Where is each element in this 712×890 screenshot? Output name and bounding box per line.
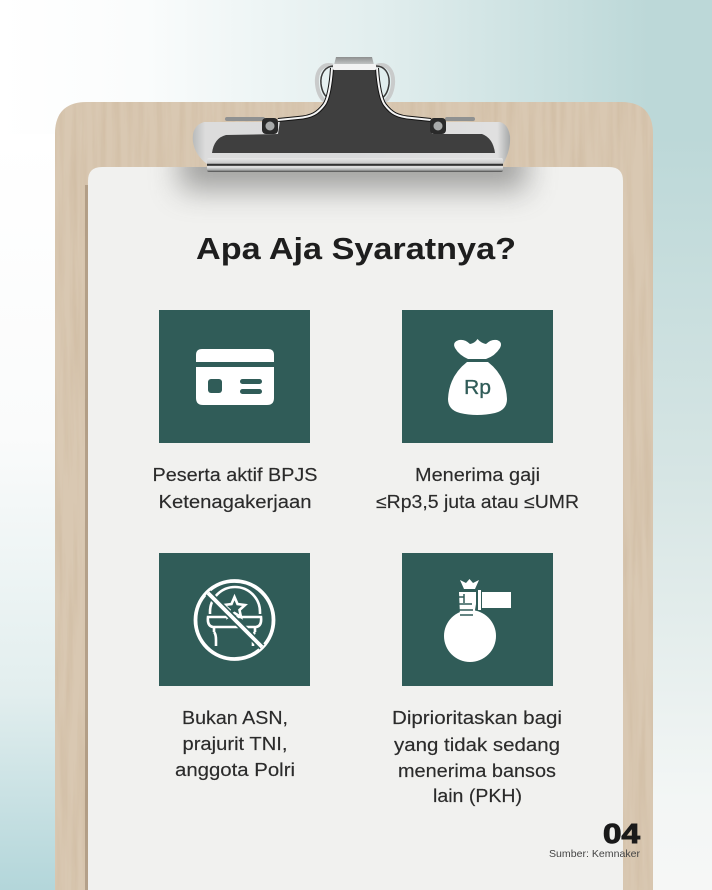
clip spring loops [317,65,393,102]
paper sheet [88,140,623,890]
panel: PKH priority [392,553,562,806]
text: PKH requirement: Diprioritaskan bagi [392,708,562,728]
clip dark body [212,68,495,153]
text: PKH requirement: menerima bansos [398,761,556,781]
text: salary requirement: Menerima gaji [415,465,540,485]
icon: money bag: Rp [464,377,491,399]
text: BPJS requirement: Peserta aktif BPJS [152,465,318,485]
text: BPJS requirement: Ketenagakerjaan [158,492,312,512]
text: PKH requirement [392,708,562,806]
clip roller [207,158,503,172]
icon: prohibited helmet [196,581,274,659]
clip neck highlights [278,68,431,120]
clip top tab [333,57,376,70]
source note: Sumber: Kemnaker [549,848,640,860]
text: BPJS requirement [152,465,318,512]
panel: BPJS card [152,310,318,512]
clipboard board [55,102,653,890]
text: not ASN requirement: anggota Polri [175,760,295,780]
text: not ASN requirement: Bukan ASN, [182,708,288,728]
text: not ASN requirement [175,708,295,780]
clip bolts [262,118,446,134]
clip lever arms [225,117,475,121]
clip plate [193,122,510,164]
panel: not ASN [159,553,310,780]
text: PKH requirement: yang tidak sedang [394,735,560,755]
icon: hand holding bag [444,579,511,662]
text: salary requirement [376,465,579,512]
metal clip [193,57,510,172]
text: salary requirement: ≤Rp3,5 juta atau ≤UMR [376,492,579,512]
icon: money bag [448,339,507,415]
panel: salary [376,310,579,512]
page number: 04 [603,818,640,849]
title: Apa Aja Syaratnya? [196,231,516,266]
text: not ASN requirement: prajurit TNI, [182,734,288,754]
icon: membership card [196,349,274,405]
text: PKH requirement: lain (PKH) [433,786,522,806]
